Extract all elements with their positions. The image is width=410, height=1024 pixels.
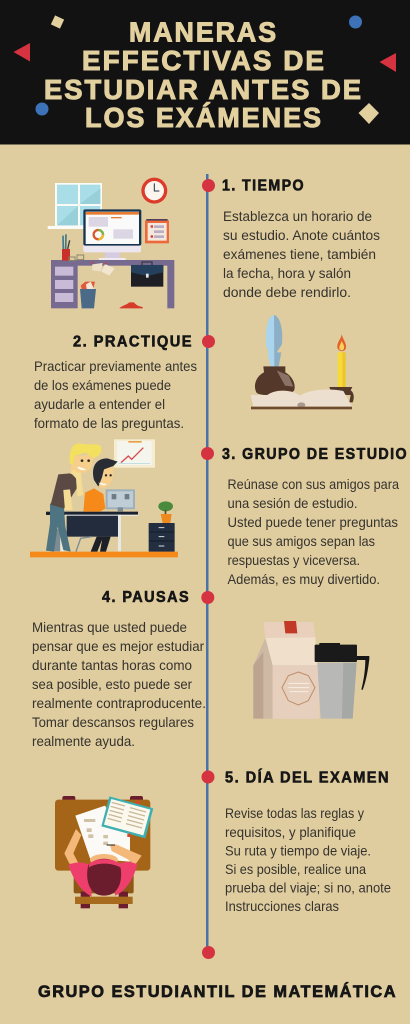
glasses (69, 255, 84, 261)
text block: día del examen: Instrucciones claras (225, 898, 339, 914)
decor: cream diamond (358, 103, 379, 124)
computer tower (52, 529, 60, 551)
text block: grupo de estudio: Además, es muy divertido. (228, 571, 380, 587)
sticky notes (91, 262, 115, 276)
text block: grupo de estudio: Usted puede tener preguntas (228, 514, 398, 530)
slipper (119, 302, 143, 308)
title (44, 16, 363, 133)
text block: pausas: durante tantas horas como (32, 657, 192, 673)
calendar (145, 219, 169, 243)
text block: tiempo: donde debe rendirlo. (223, 284, 351, 300)
tall student (46, 443, 101, 552)
floor (30, 552, 178, 557)
decor: right red triangle (380, 53, 396, 72)
illustration: student at desk from above (55, 796, 153, 908)
timeline (201, 174, 215, 959)
torso (68, 862, 137, 897)
drawer cabinet (149, 523, 175, 552)
desk (55, 796, 150, 871)
heading: 4. Pausas: 4. PAUSAS (102, 589, 190, 606)
illustration: office desk (48, 178, 174, 308)
text block: practique: Practicar previamente antes (34, 358, 197, 374)
text block: grupo de estudio: respuestas y viceversa. (228, 552, 360, 568)
header panel (0, 0, 410, 144)
plant (158, 501, 173, 523)
text block: tiempo (223, 208, 380, 300)
text block: día del examen (225, 805, 391, 914)
heading: 1. Tiempo: 1. TIEMPO (222, 178, 305, 195)
window (48, 183, 102, 229)
text block: pausas: realmente contraproducente. (32, 695, 206, 711)
text block: pausas: pensar que es mejor estudiar (32, 638, 204, 654)
pen cup (62, 234, 70, 261)
decor: bottom blue circle (36, 102, 48, 116)
text block: grupo de estudio (228, 476, 399, 587)
text block: tiempo: exámenes tiene, también (223, 246, 376, 262)
chart poster (114, 439, 155, 468)
paper bag (253, 621, 319, 719)
text block: practique (34, 358, 197, 431)
footer: GRUPO ESTUDIANTIL DE MATEMÁTICA (38, 982, 397, 1001)
desk (51, 260, 174, 308)
text block: día del examen: requisitos, y planifique (225, 824, 356, 840)
text block: practique: ayudarle a entender el (34, 396, 165, 412)
text block: pausas (32, 619, 206, 749)
decor: left red triangle (14, 43, 30, 62)
text block: tiempo: la fecha, hora y salón (223, 265, 351, 281)
heading: 5. Día del examen: 5. DÍA DEL EXAMEN (225, 770, 390, 787)
text block: pausas: Mientras que usted puede (32, 619, 187, 635)
text block: grupo de estudio: que sus amigos sepan las (228, 533, 375, 549)
text block: día del examen: Su ruta y tiempo de viaje. (225, 842, 371, 858)
open book (251, 390, 352, 409)
text block: día del examen: prueba del viaje; si no, anote (225, 880, 391, 896)
text block: pausas: Tomar descansos regulares (32, 714, 194, 730)
decor: top blue circle (349, 16, 362, 28)
decor: cream square (51, 15, 64, 29)
clock (141, 178, 167, 204)
text block: grupo de estudio: una sesión de estudio. (228, 495, 358, 511)
arms (64, 829, 142, 865)
illustration: two students at computer (30, 439, 178, 557)
text block: tiempo: su estudio. Anote cuántos (223, 227, 380, 243)
waste bin (80, 282, 96, 308)
text block: practique: de los exámenes puede (34, 377, 171, 393)
seated student (76, 458, 118, 552)
chair (74, 868, 134, 908)
text block: pausas: sea posible, esto puede ser (32, 676, 192, 692)
thermos (315, 643, 369, 719)
candle (329, 334, 354, 402)
head (87, 854, 121, 896)
title: EFFECTIVAS DE (82, 45, 326, 76)
exam papers (75, 806, 130, 862)
monitor (83, 209, 141, 260)
open textbook (101, 796, 153, 838)
title: ESTUDIAR ANTES DE (44, 74, 363, 105)
illustration: lunch bag and thermos (253, 621, 369, 719)
title: MANERAS (129, 16, 278, 48)
title: LOS EXÁMENES (85, 102, 323, 133)
monitor (106, 489, 135, 511)
illustration: quill, inkwell, book and candle (251, 315, 354, 409)
text block: tiempo: Establezca un horario de (223, 208, 372, 224)
heading: 2. Practique: 2. PRACTIQUE (73, 334, 193, 351)
briefcase (131, 262, 163, 287)
inkwell (255, 366, 295, 395)
desk (46, 512, 138, 551)
quill feather (266, 315, 282, 367)
text block: practique: formato de las preguntas. (34, 415, 184, 431)
text block: día del examen: Si es posible, realice una (225, 861, 366, 877)
text block: día del examen: Revise todas las reglas y (225, 805, 364, 821)
text block: pausas: realmente ayuda. (32, 733, 135, 749)
